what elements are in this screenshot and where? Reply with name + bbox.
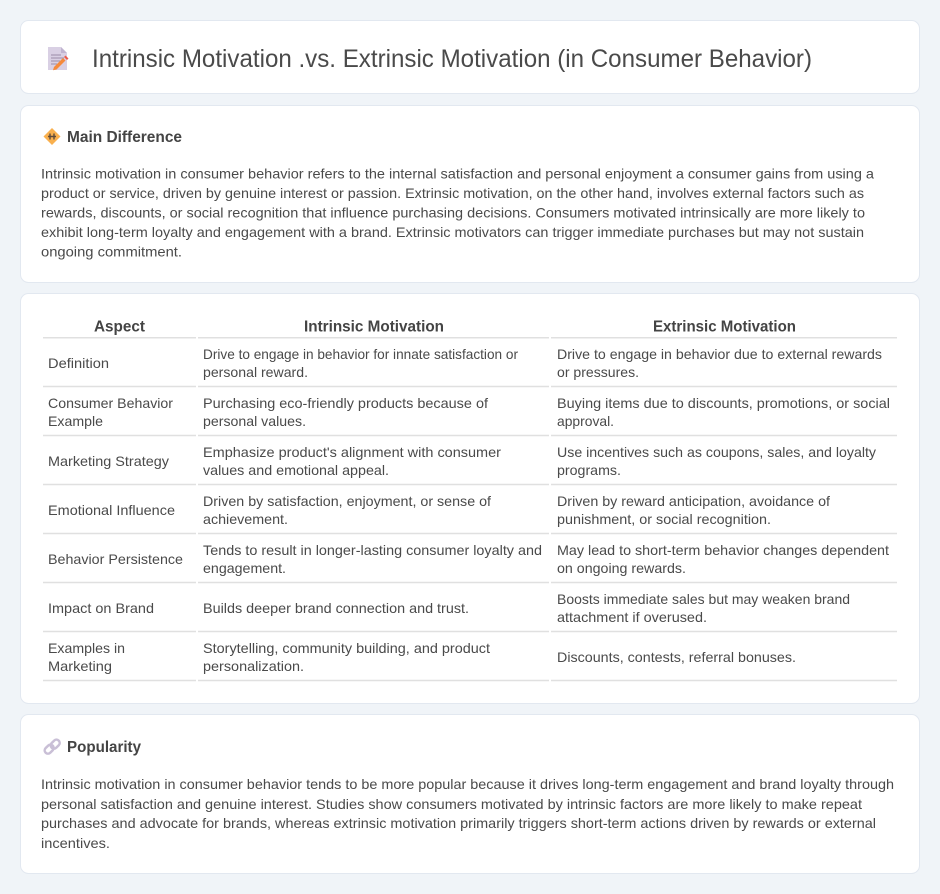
text block: popularity paragraph: personal satisfaction and genuine interest. Studies show consumers motivated by intrinsic factors are more likely to make repeat xyxy=(41,796,862,812)
row: behavior persistence: May lead to short-term behavior changes dependent xyxy=(557,542,889,558)
row: impact on brand: Impact on Brand xyxy=(48,600,154,616)
panel: comparison table xyxy=(20,294,920,704)
row: behavior persistence: engagement. xyxy=(203,560,286,576)
row: marketing strategy xyxy=(48,444,876,478)
panel: main difference xyxy=(20,106,920,282)
text block: popularity paragraph: incentives. xyxy=(41,835,110,851)
row: impact on brand: Boosts immediate sales but may weaken brand xyxy=(557,591,850,607)
row: marketing strategy: programs. xyxy=(557,462,621,478)
row: examples in marketing xyxy=(48,640,796,674)
row: consumer behavior example: Consumer Behavior xyxy=(48,395,173,411)
row: emotional influence: Driven by satisfaction, enjoyment, or sense of xyxy=(203,493,491,509)
text block: popularity paragraph: purchases and advocate for brands, whereas extrinsic motivation primarily triggers short-term actions driven by rewards or external xyxy=(41,815,876,831)
row: consumer behavior example: personal values. xyxy=(203,413,306,429)
row: marketing strategy: Emphasize product's alignment with consumer xyxy=(203,444,501,460)
row: definition: Drive to engage in behavior for innate satisfaction or xyxy=(203,346,518,362)
row: behavior persistence: on ongoing rewards. xyxy=(557,560,686,576)
row: impact on brand: attachment if overused. xyxy=(557,609,707,625)
table header row xyxy=(94,318,796,336)
title: Intrinsic Motivation .vs. Extrinsic Motivation (in Consumer Behavior) xyxy=(92,45,812,73)
heading: popularity: Popularity xyxy=(67,739,141,756)
row: consumer behavior example: Example xyxy=(48,413,103,429)
row: definition: or pressures. xyxy=(557,364,639,380)
panel: popularity xyxy=(20,714,920,874)
text block: main difference paragraph: product or service, driven by genuine interest or passion. Extrinsic motivation, on the other hand, involves external factors such as xyxy=(41,185,864,201)
table header row: Aspect xyxy=(94,318,146,336)
text block: main difference paragraph: rewards, discounts, or social recognition that influence purchasing decisions. Consumers motivated intrinsically are more likely to xyxy=(41,204,865,220)
row: impact on brand xyxy=(48,591,850,625)
row: marketing strategy: Marketing Strategy xyxy=(48,453,169,469)
row: consumer behavior example: approval. xyxy=(557,413,614,429)
row: examples in marketing: Discounts, contests, referral bonuses. xyxy=(557,649,796,665)
row: examples in marketing: Storytelling, community building, and product xyxy=(203,640,490,656)
icon: link xyxy=(43,738,61,755)
text block: popularity paragraph xyxy=(41,776,894,851)
row: marketing strategy: values and emotional appeal. xyxy=(203,462,389,478)
row: emotional influence xyxy=(48,493,830,527)
row: emotional influence: Emotional Influence xyxy=(48,502,175,518)
text block: main difference paragraph: ongoing commitment. xyxy=(41,244,182,260)
row: consumer behavior example: Buying items due to discounts, promotions, or social xyxy=(557,395,890,411)
text block: main difference paragraph: Intrinsic motivation in consumer behavior refers to the internal satisfaction and personal enjoyment a consumer gains from using a xyxy=(41,166,874,182)
row: behavior persistence: Behavior Persistence xyxy=(48,551,183,567)
row: behavior persistence: Tends to result in longer-lasting consumer loyalty and xyxy=(203,542,542,558)
row: behavior persistence xyxy=(48,542,889,576)
row: examples in marketing: personalization. xyxy=(203,658,304,674)
text block: main difference paragraph: exhibit long-term loyalty and engagement with a brand. Extrinsic motivators can trigger immediate purchases but may not sustain xyxy=(41,224,864,240)
text block: popularity paragraph: Intrinsic motivation in consumer behavior tends to be more popular because it drives long-term engagement and brand loyalty through xyxy=(41,776,894,792)
icon: document with pencil xyxy=(48,47,68,70)
row: impact on brand: Builds deeper brand connection and trust. xyxy=(203,600,469,616)
table header row: Intrinsic Motivation xyxy=(304,318,444,336)
row: consumer behavior example: Purchasing eco-friendly products because of xyxy=(203,395,488,411)
row: definition: personal reward. xyxy=(203,364,308,380)
row: examples in marketing: Marketing xyxy=(48,658,112,674)
row: marketing strategy: Use incentives such as coupons, sales, and loyalty xyxy=(557,444,876,460)
row: definition xyxy=(48,346,882,380)
row: examples in marketing: Examples in xyxy=(48,640,125,656)
panel: title header xyxy=(20,20,920,94)
row: definition: Definition xyxy=(48,355,109,371)
heading: main difference: Main Difference xyxy=(67,129,182,146)
table header row: Extrinsic Motivation xyxy=(653,318,796,336)
text block: main difference paragraph xyxy=(41,166,874,260)
row: definition: Drive to engage in behavior due to external rewards xyxy=(557,346,882,362)
row: emotional influence: Driven by reward anticipation, avoidance of xyxy=(557,493,830,509)
row: emotional influence: punishment, or social recognition. xyxy=(557,511,771,527)
icon: diamond sign xyxy=(44,128,60,145)
row: consumer behavior example xyxy=(48,395,890,429)
row: emotional influence: achievement. xyxy=(203,511,288,527)
